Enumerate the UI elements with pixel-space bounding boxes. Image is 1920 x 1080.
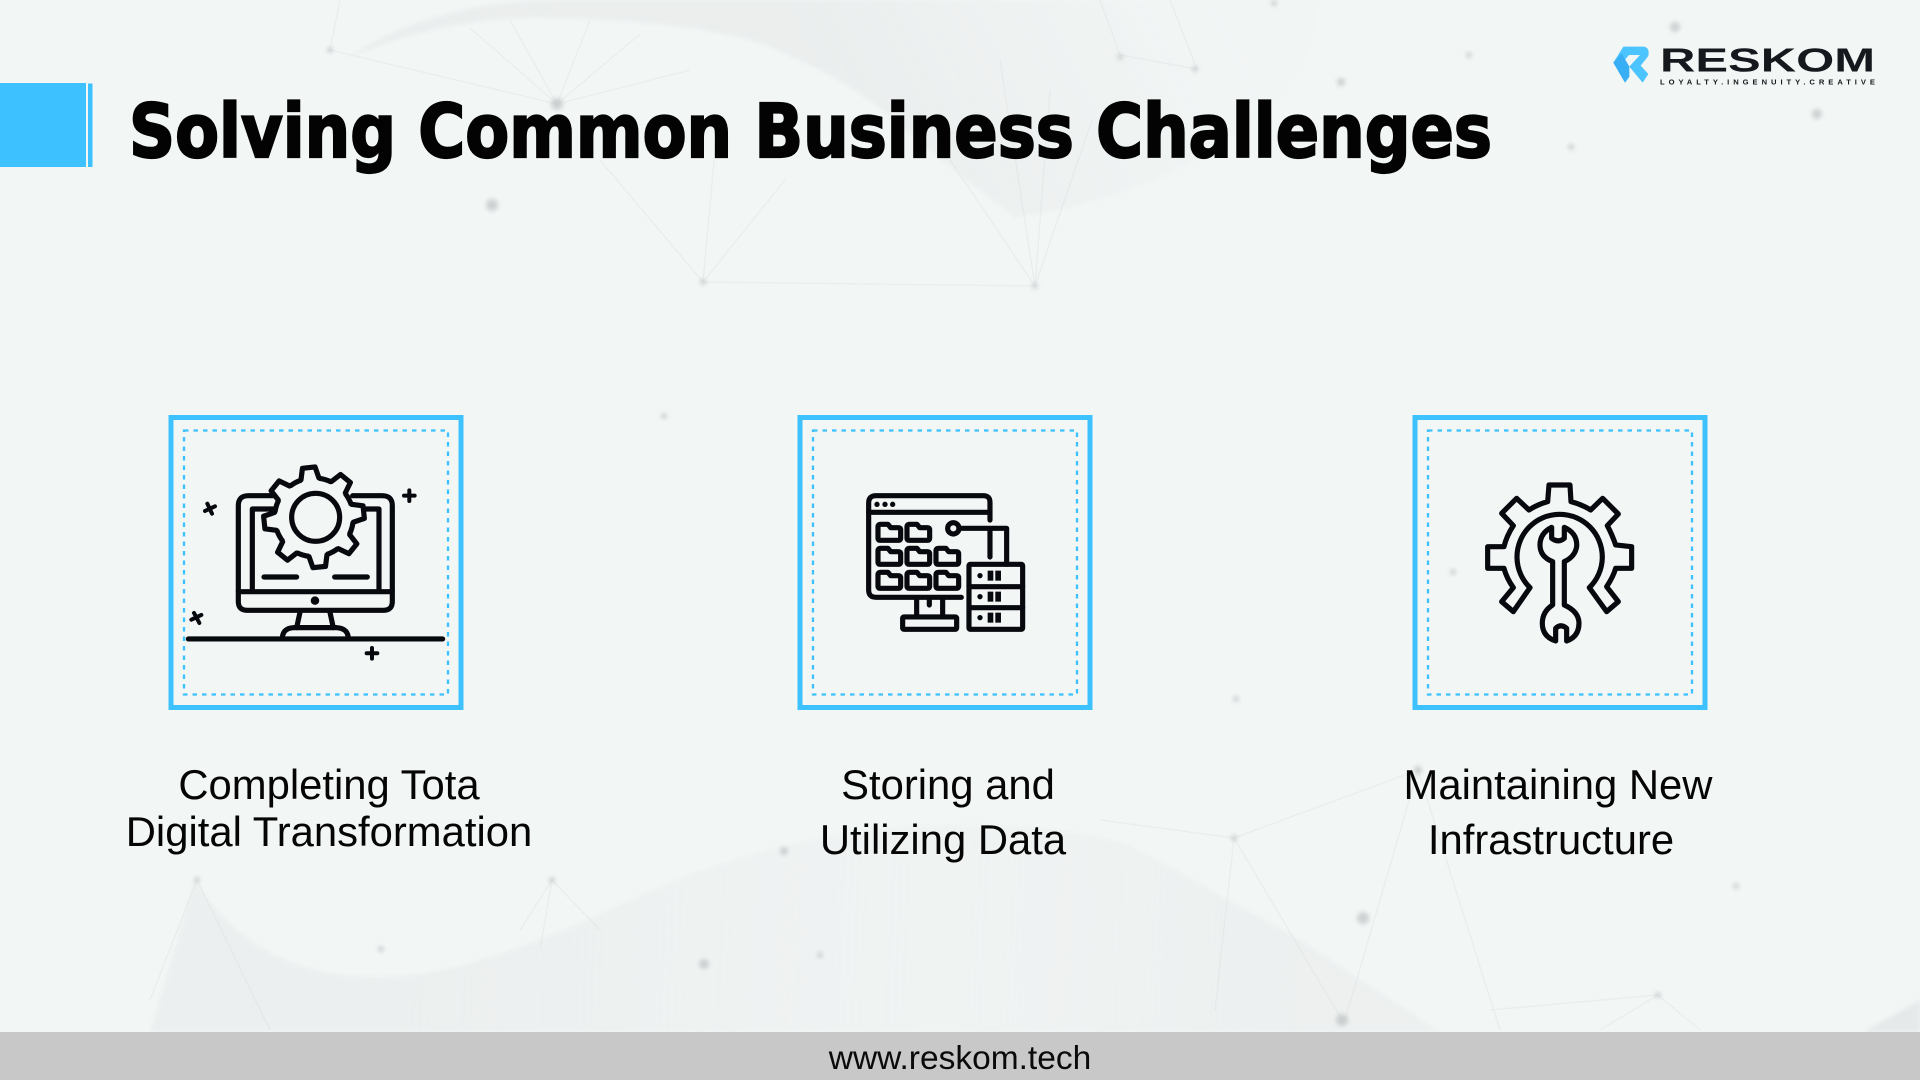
- label: storing and utilizing data: Storing and: [841, 761, 1055, 808]
- label: completing total digital transformation: Completing Tota: [178, 761, 480, 808]
- panel: storing data: [800, 418, 1090, 863]
- label: storing and utilizing data: Utilizing Data: [820, 816, 1067, 863]
- footer url: www.reskom.tech: [828, 1040, 1091, 1077]
- icon: gear with wrench: [1488, 485, 1632, 641]
- card frame: [800, 418, 1090, 708]
- card frame: [171, 418, 461, 708]
- logo mark: [1613, 47, 1649, 83]
- logo: Reskom: [1613, 42, 1875, 86]
- title: Solving Common Business Challenges: [129, 89, 1492, 175]
- card frame: [1415, 418, 1705, 708]
- label: maintaining new infrastructure: [1404, 761, 1713, 863]
- panel: maintaining infrastructure: [1404, 418, 1713, 863]
- title accent block: [0, 83, 92, 167]
- label: completing total digital transformation: [126, 761, 532, 855]
- label: maintaining new infrastructure: Infrastructure: [1428, 816, 1674, 863]
- label: storing and utilizing data: [820, 761, 1067, 863]
- label: completing total digital transformation: Digital Transformation: [126, 808, 532, 855]
- icon: monitor with gear: [188, 467, 443, 659]
- logo tagline: LOYALTY.INGENUITY.CREATIVE: [1660, 78, 1875, 86]
- logo wordmark: RESKOM: [1660, 42, 1875, 78]
- label: maintaining new infrastructure: Maintaining New: [1404, 761, 1713, 808]
- footer bar: [0, 1032, 1920, 1080]
- panel: digital transformation: [126, 418, 532, 855]
- icon: folders window and server: [869, 496, 1023, 629]
